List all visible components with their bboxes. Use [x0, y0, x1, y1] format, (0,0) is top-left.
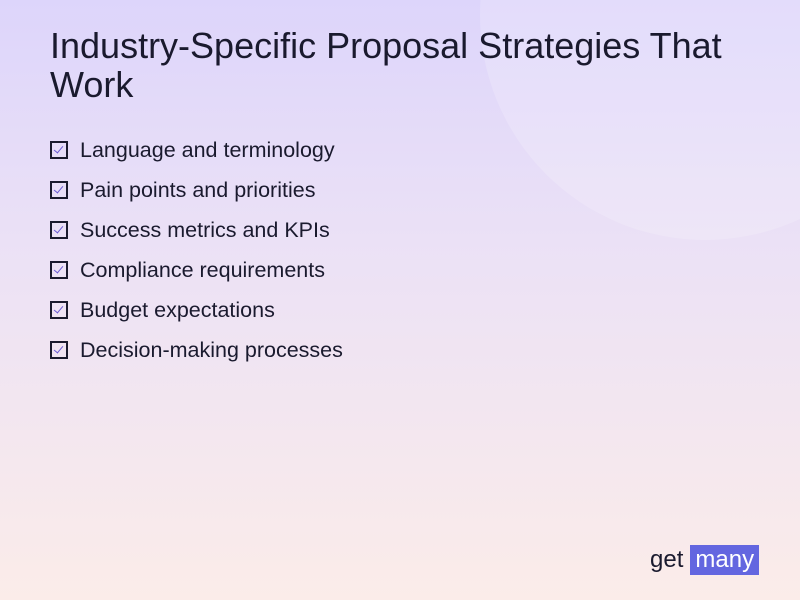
checklist: [50, 138, 343, 362]
logo: many: [695, 546, 754, 573]
item: pain points: Pain points and priorities: [80, 178, 315, 202]
item: budget: Budget expectations: [80, 298, 275, 322]
item: compliance: Compliance requirements: [80, 258, 325, 282]
item: metrics: Success metrics and KPIs: [80, 218, 330, 242]
logo: [650, 545, 759, 575]
title: Industry-Specific Proposal Strategies That Work: [50, 25, 722, 105]
logo: get: [650, 546, 683, 573]
item: language: Language and terminology: [80, 138, 335, 162]
item: decision: Decision-making processes: [80, 338, 343, 362]
